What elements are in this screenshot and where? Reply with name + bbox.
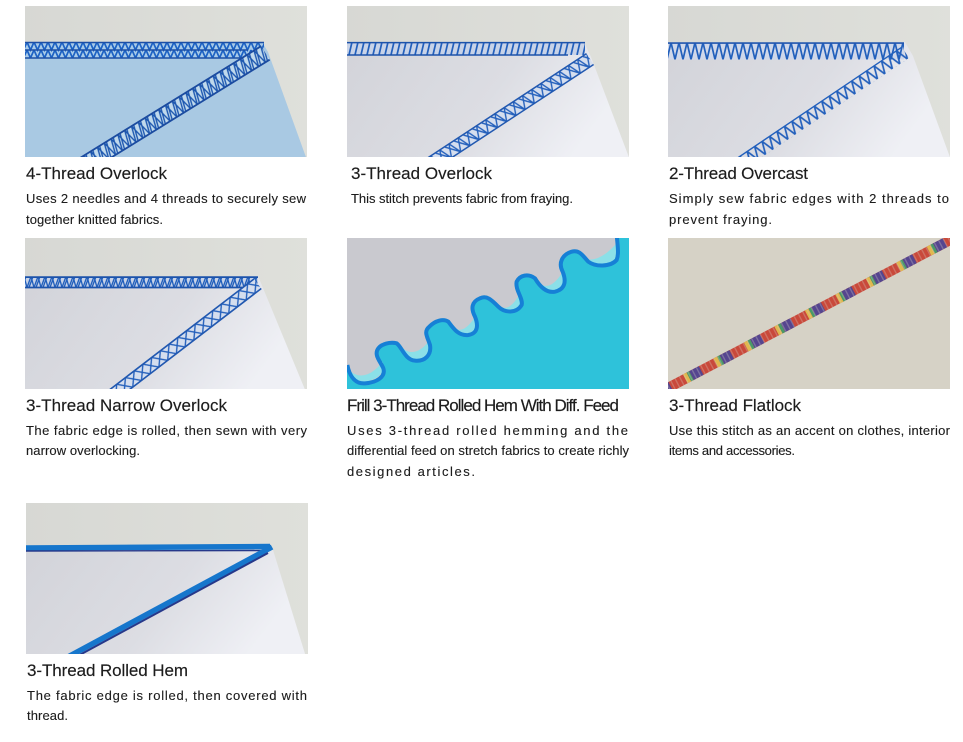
description [26, 423, 308, 458]
description [347, 423, 630, 479]
card: 3-Thread Narrow Overlock [20, 232, 312, 458]
description: designed articles. [347, 464, 475, 479]
description: narrow overlocking. [26, 443, 140, 458]
description: together knitted fabrics. [26, 212, 163, 227]
description: thread. [27, 708, 68, 723]
card: 3-Thread Flatlock [663, 232, 955, 458]
description: prevent fraying. [669, 212, 772, 227]
description: differential feed on stretch fabrics to create richly [347, 443, 630, 458]
card: 3-Thread Rolled Hem [21, 497, 313, 723]
description: The fabric edge is rolled, then sewn with very [26, 423, 308, 438]
photo: rainbow flatlock stitch [663, 232, 955, 394]
description: Uses 2 needles and 4 threads to securely sew [26, 191, 307, 206]
description: items and accessories. [669, 443, 795, 458]
description [669, 191, 949, 227]
description: Use this stitch as an accent on clothes, interior [669, 423, 951, 438]
title: 3-Thread Flatlock [669, 396, 802, 415]
photo: narrow overlock stitch [25, 238, 307, 389]
description: Simply sew fabric edges with 2 threads to [669, 191, 949, 206]
card: Frill 3-Thread Rolled Hem [342, 232, 635, 479]
description [26, 191, 307, 227]
card: 3-Thread Overlock [342, 0, 634, 206]
title: 3-Thread Rolled Hem [27, 661, 188, 680]
photo: 2-thread overcast stitch [668, 6, 950, 157]
description: Uses 3-thread rolled hemming and the [347, 423, 628, 438]
description: The fabric edge is rolled, then covered with [27, 688, 307, 703]
title: Frill 3-Thread Rolled Hem With Diff. Feed [347, 396, 619, 415]
photo: 4-thread overlock stitch [25, 6, 307, 157]
photo: rolled hem stitch [21, 497, 313, 659]
photo: 3-thread overlock stitch [347, 6, 629, 157]
photo: frill rolled hem [347, 238, 629, 389]
card: 4-Thread Overlock [20, 0, 312, 227]
title: 4-Thread Overlock [26, 164, 168, 183]
title: 3-Thread Narrow Overlock [26, 396, 228, 415]
title: 3-Thread Overlock [351, 164, 492, 183]
description: This stitch prevents fabric from fraying. [351, 191, 573, 206]
description [27, 688, 307, 723]
description [669, 423, 951, 458]
title: 2-Thread Overcast [669, 164, 808, 183]
card: 2-Thread Overcast [663, 0, 955, 227]
